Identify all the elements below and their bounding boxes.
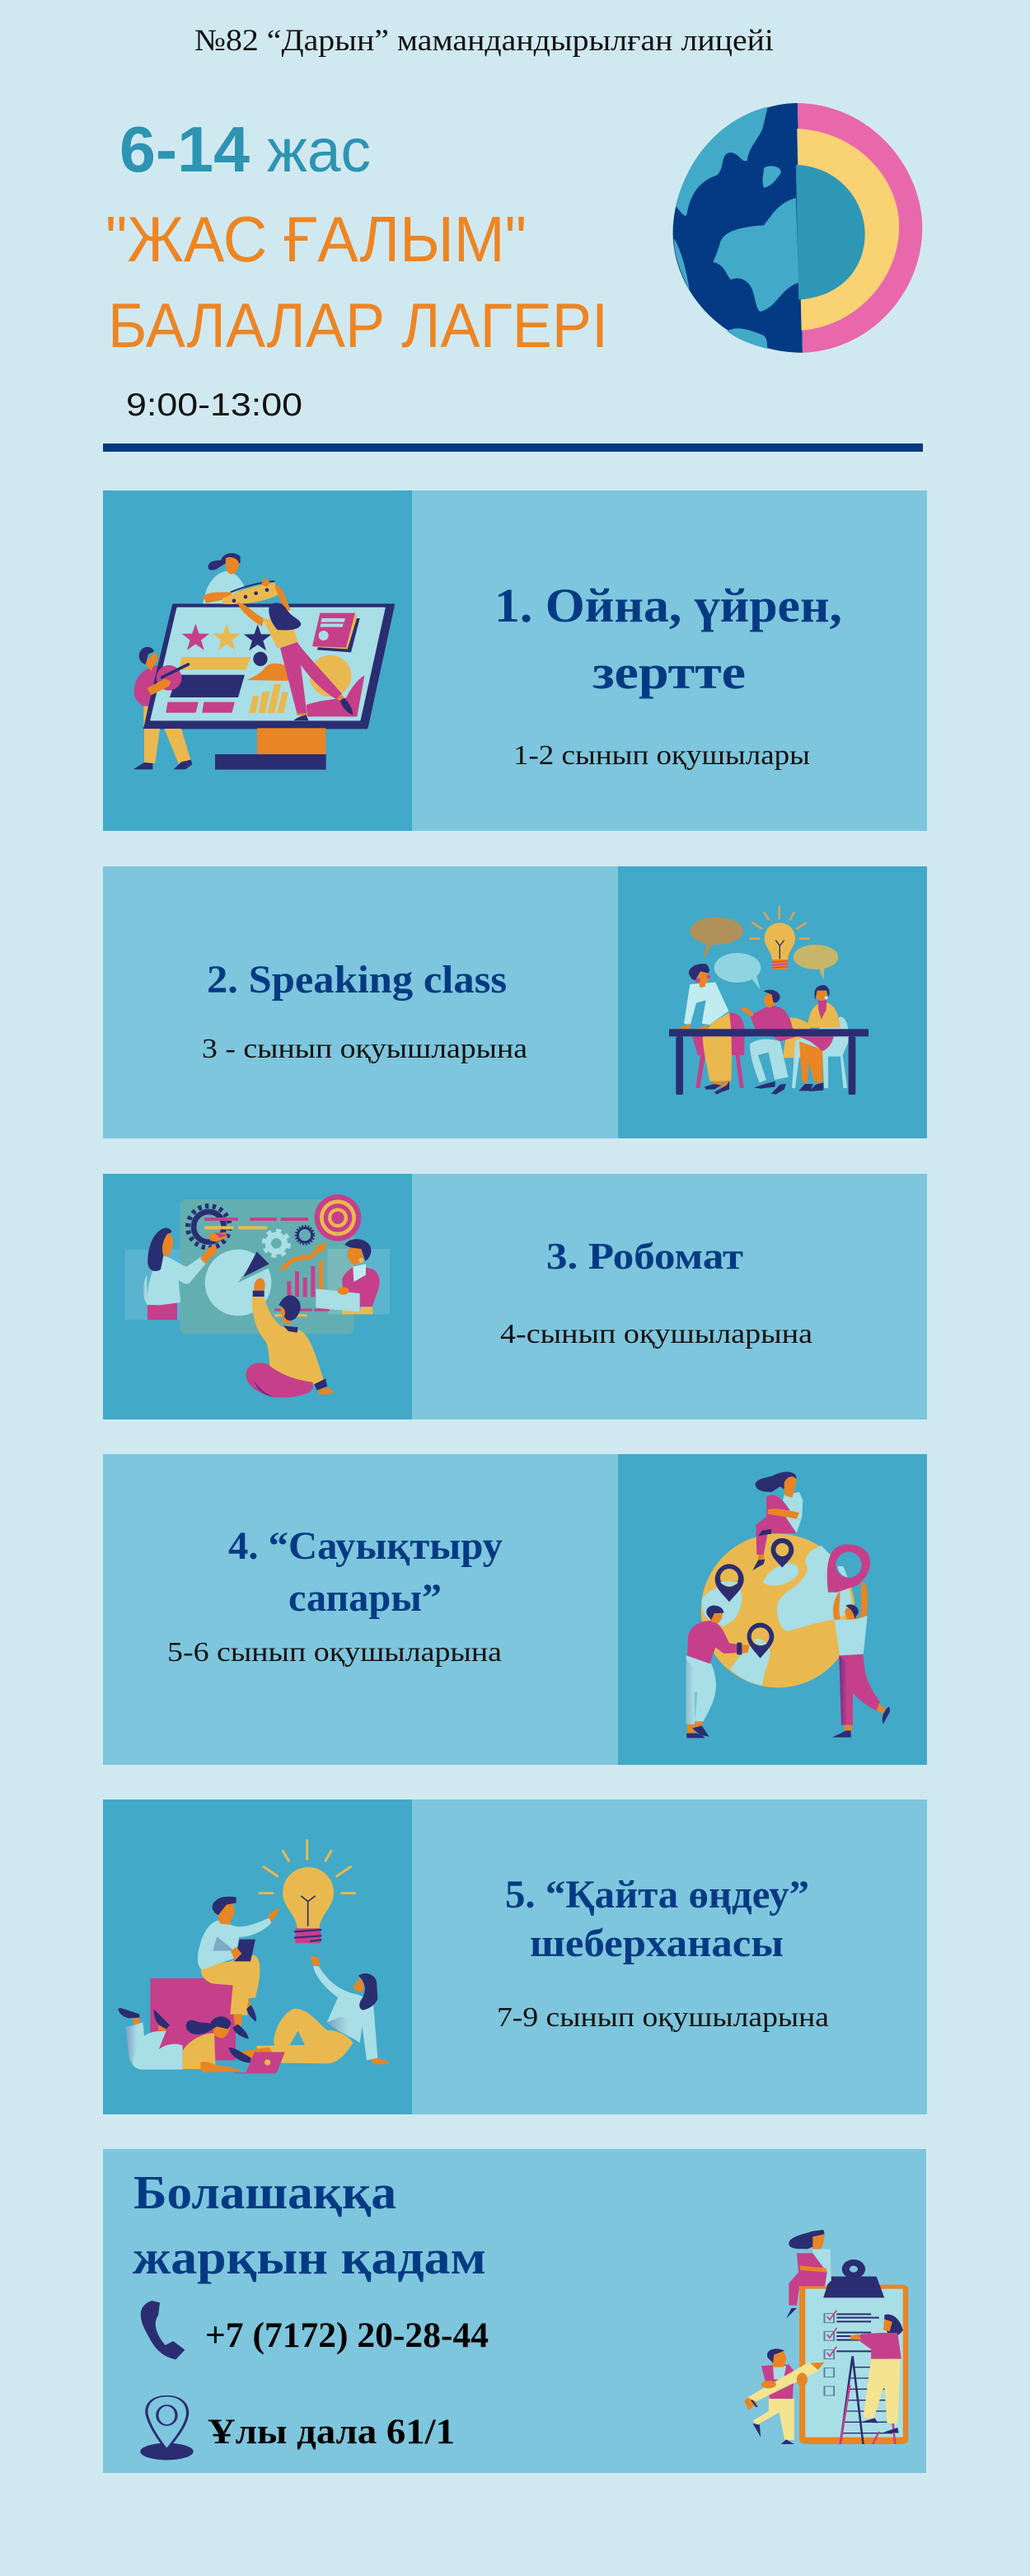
illustration tile (618, 1454, 927, 1765)
heading line 1: 1. Ойна, үйрен, (494, 579, 842, 632)
panel 4 (103, 1454, 927, 1765)
audience: 5-6 сынып оқушыларына (167, 1637, 502, 1668)
audience: 4-сынып оқушыларына (500, 1319, 812, 1349)
phone number: +7 (7172) 20-28-44 (205, 2316, 489, 2355)
audience: 3 - сынып оқуышларына (202, 1034, 527, 1064)
heading line 2: шеберханасы (530, 1921, 784, 1965)
title line 1: "ЖАС ҒАЛЫМ" (105, 203, 527, 275)
heading line 2: зертте (592, 645, 746, 699)
title line 2: БАЛАЛАР ЛАГЕРІ (108, 291, 608, 361)
panel background (103, 1174, 927, 1419)
panel background (103, 866, 927, 1138)
illustration tile (618, 866, 927, 1138)
illustration: discussion at a table (669, 907, 868, 1095)
illustration: team building a screen (133, 553, 393, 770)
illustration: team at a data board (125, 1194, 390, 1397)
panel: contacts footer (103, 2149, 926, 2473)
illustration: people with a checklist (744, 2230, 908, 2444)
icon: location pin (140, 2396, 194, 2460)
illustration: people reaching for a light bulb (118, 1841, 390, 2073)
illustration tile (103, 1174, 412, 1419)
slogan line 2: жарқын қадам (133, 2231, 486, 2284)
school name: №82 “Дарын” мамандандырылған лицейі (194, 24, 774, 58)
illustration: people around a globe (686, 1472, 890, 1738)
heading line 2: сапары” (288, 1576, 442, 1620)
audience: 7-9 сынып оқушыларына (497, 2002, 829, 2033)
heading: 2. Speaking class (207, 958, 507, 1002)
panel 1 (103, 490, 927, 831)
age range: 6-14 (119, 113, 250, 185)
heading line 1: 5. “Қайта өңдеу” (505, 1873, 809, 1917)
time: 9:00-13:00 (126, 387, 302, 423)
audience: 1-2 сынып оқушылары (513, 740, 810, 771)
panel 5 (103, 1799, 927, 2114)
panel 3 (103, 1174, 927, 1419)
slogan line 1: Болашаққа (133, 2165, 396, 2219)
panel background (103, 2149, 926, 2473)
panel 2 (103, 866, 927, 1138)
icon: earth cross-section globe (673, 103, 922, 353)
heading line 1: 4. “Сауықтыру (228, 1524, 503, 1568)
heading: 3. Робомат (546, 1235, 743, 1277)
illustration tile (103, 1799, 412, 2114)
header (103, 24, 923, 452)
address: Ұлы дала 61/1 (208, 2413, 455, 2452)
panel background (103, 490, 927, 831)
illustration tile (103, 490, 412, 831)
panel background (103, 1799, 927, 2114)
panel background (103, 1454, 927, 1765)
icon: phone (141, 2301, 185, 2359)
age unit: жас (267, 116, 371, 185)
header rule (103, 443, 923, 452)
